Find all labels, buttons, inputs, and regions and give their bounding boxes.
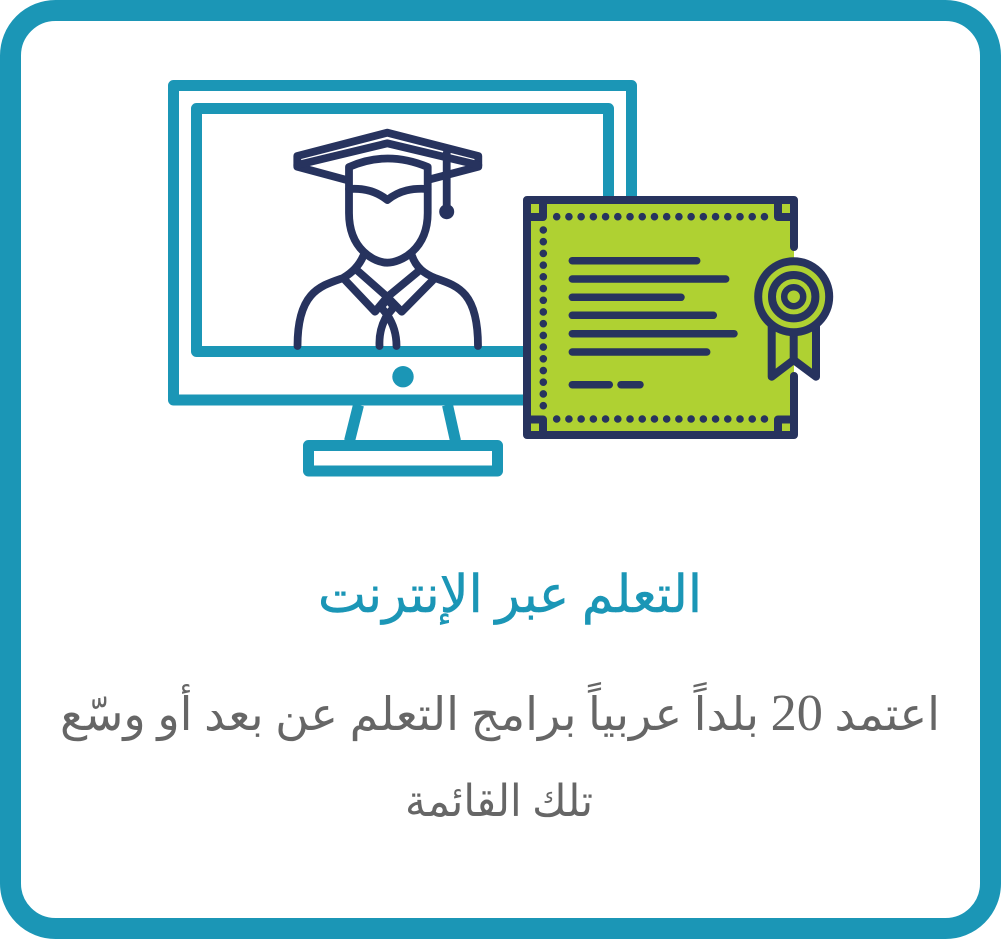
text block: description [60, 682, 940, 826]
icon: online learning illustration [174, 86, 829, 471]
icon: rosette ribbon [758, 261, 829, 377]
icon: computer monitor [174, 86, 632, 471]
description line 2: تلك القائمة [405, 777, 593, 826]
icon: green certificate [527, 200, 829, 435]
heading: التعلم عبر الإنترنت [318, 567, 702, 625]
certificate dotted border [543, 217, 765, 419]
description line 1: اعتمد 20 بلداً عربياً برامج التعلم عن بعد أو وسّع [60, 682, 940, 742]
certificate text lines [572, 261, 734, 385]
icon: graduate with cap [297, 133, 478, 346]
